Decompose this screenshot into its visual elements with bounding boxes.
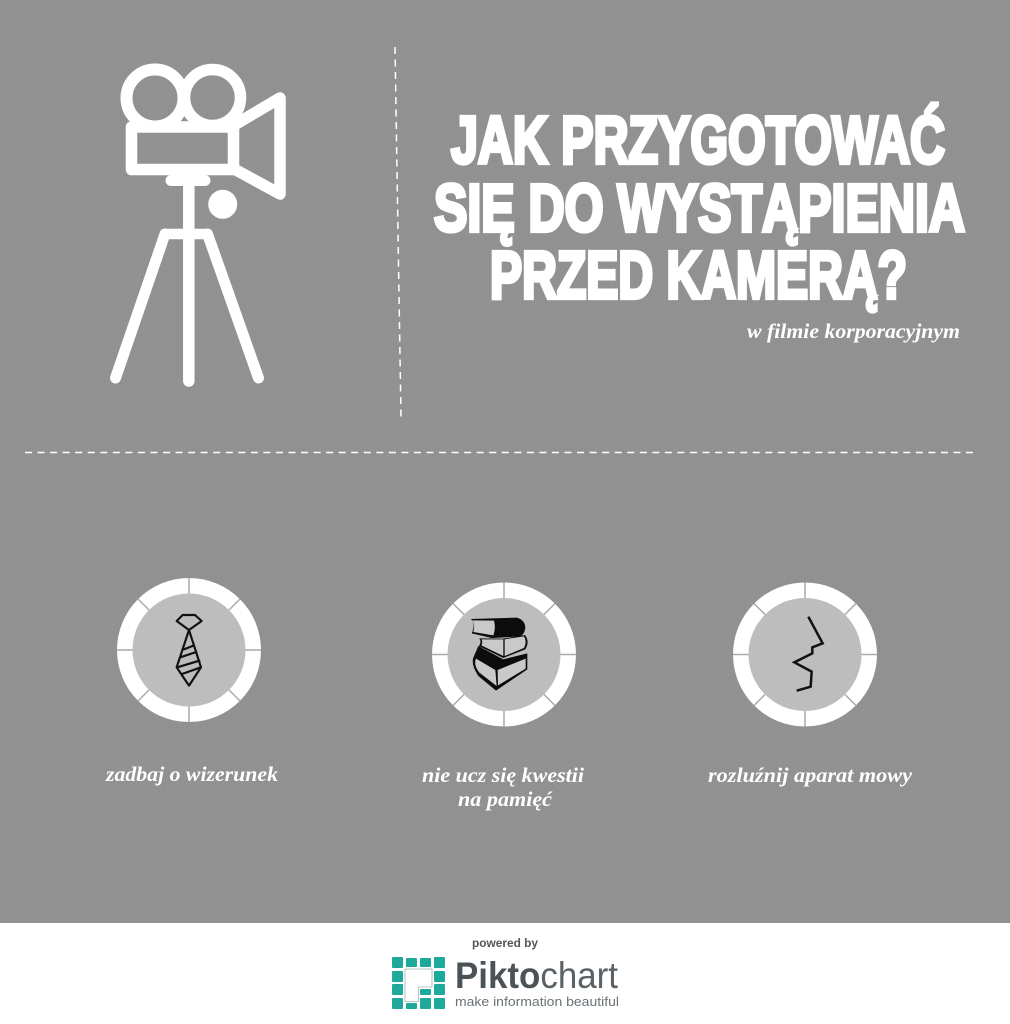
icon: stack of books in ring — [432, 582, 576, 726]
label: do not memorise: na pamięć — [458, 787, 553, 811]
label: image: zadbaj o wizerunek — [105, 762, 279, 786]
subtitle: w filmie korporacyjnym — [747, 319, 960, 343]
footer: Piktochart wordmark: Piktochart — [455, 955, 619, 996]
divider: vertical dashed line — [395, 47, 401, 418]
divider: horizontal dashed line — [25, 452, 973, 454]
icon: mouth profile in ring — [733, 582, 877, 726]
icon: tie in ring — [117, 578, 261, 722]
footer: tagline: make information beautiful — [455, 994, 619, 1009]
label: do not memorise: nie ucz się kwestii — [422, 763, 584, 787]
footer: powered by: powered by — [472, 938, 539, 950]
title — [434, 103, 965, 313]
footer panel — [0, 923, 1010, 1024]
footer: Piktochart logo mark — [392, 957, 445, 1009]
icon: film camera on tripod — [116, 70, 280, 381]
label: relax speech organs: rozluźnij aparat mowy — [708, 763, 913, 787]
label: do not memorise — [422, 763, 584, 811]
